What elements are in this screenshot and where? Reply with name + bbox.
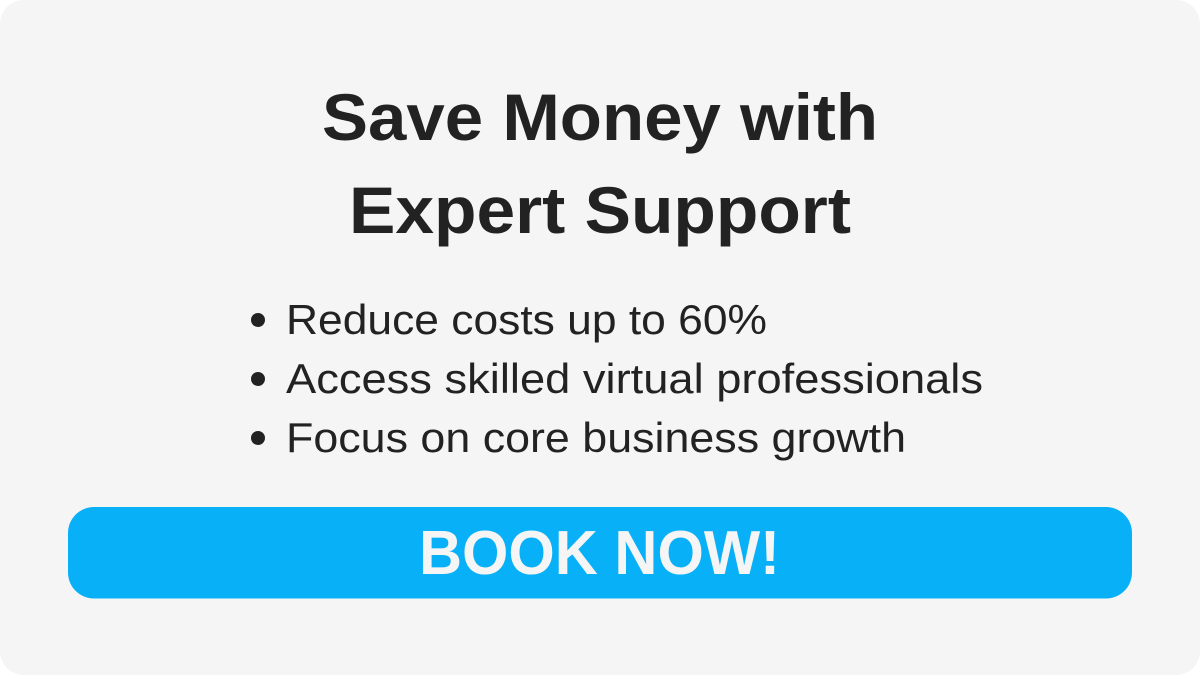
benefits list	[251, 296, 983, 461]
bullet: core business growth: Focus on core business growth	[286, 414, 906, 461]
bullet: reduce costs: Reduce costs up to 60%	[286, 296, 767, 343]
title: Expert Support	[349, 173, 851, 247]
call-to-action button: BOOK NOW!	[419, 519, 780, 588]
call-to-action button	[68, 507, 1132, 598]
title: Save Money with	[322, 80, 878, 154]
bullet: skilled professionals: Access skilled virtual professionals	[286, 355, 983, 402]
title	[322, 80, 878, 247]
